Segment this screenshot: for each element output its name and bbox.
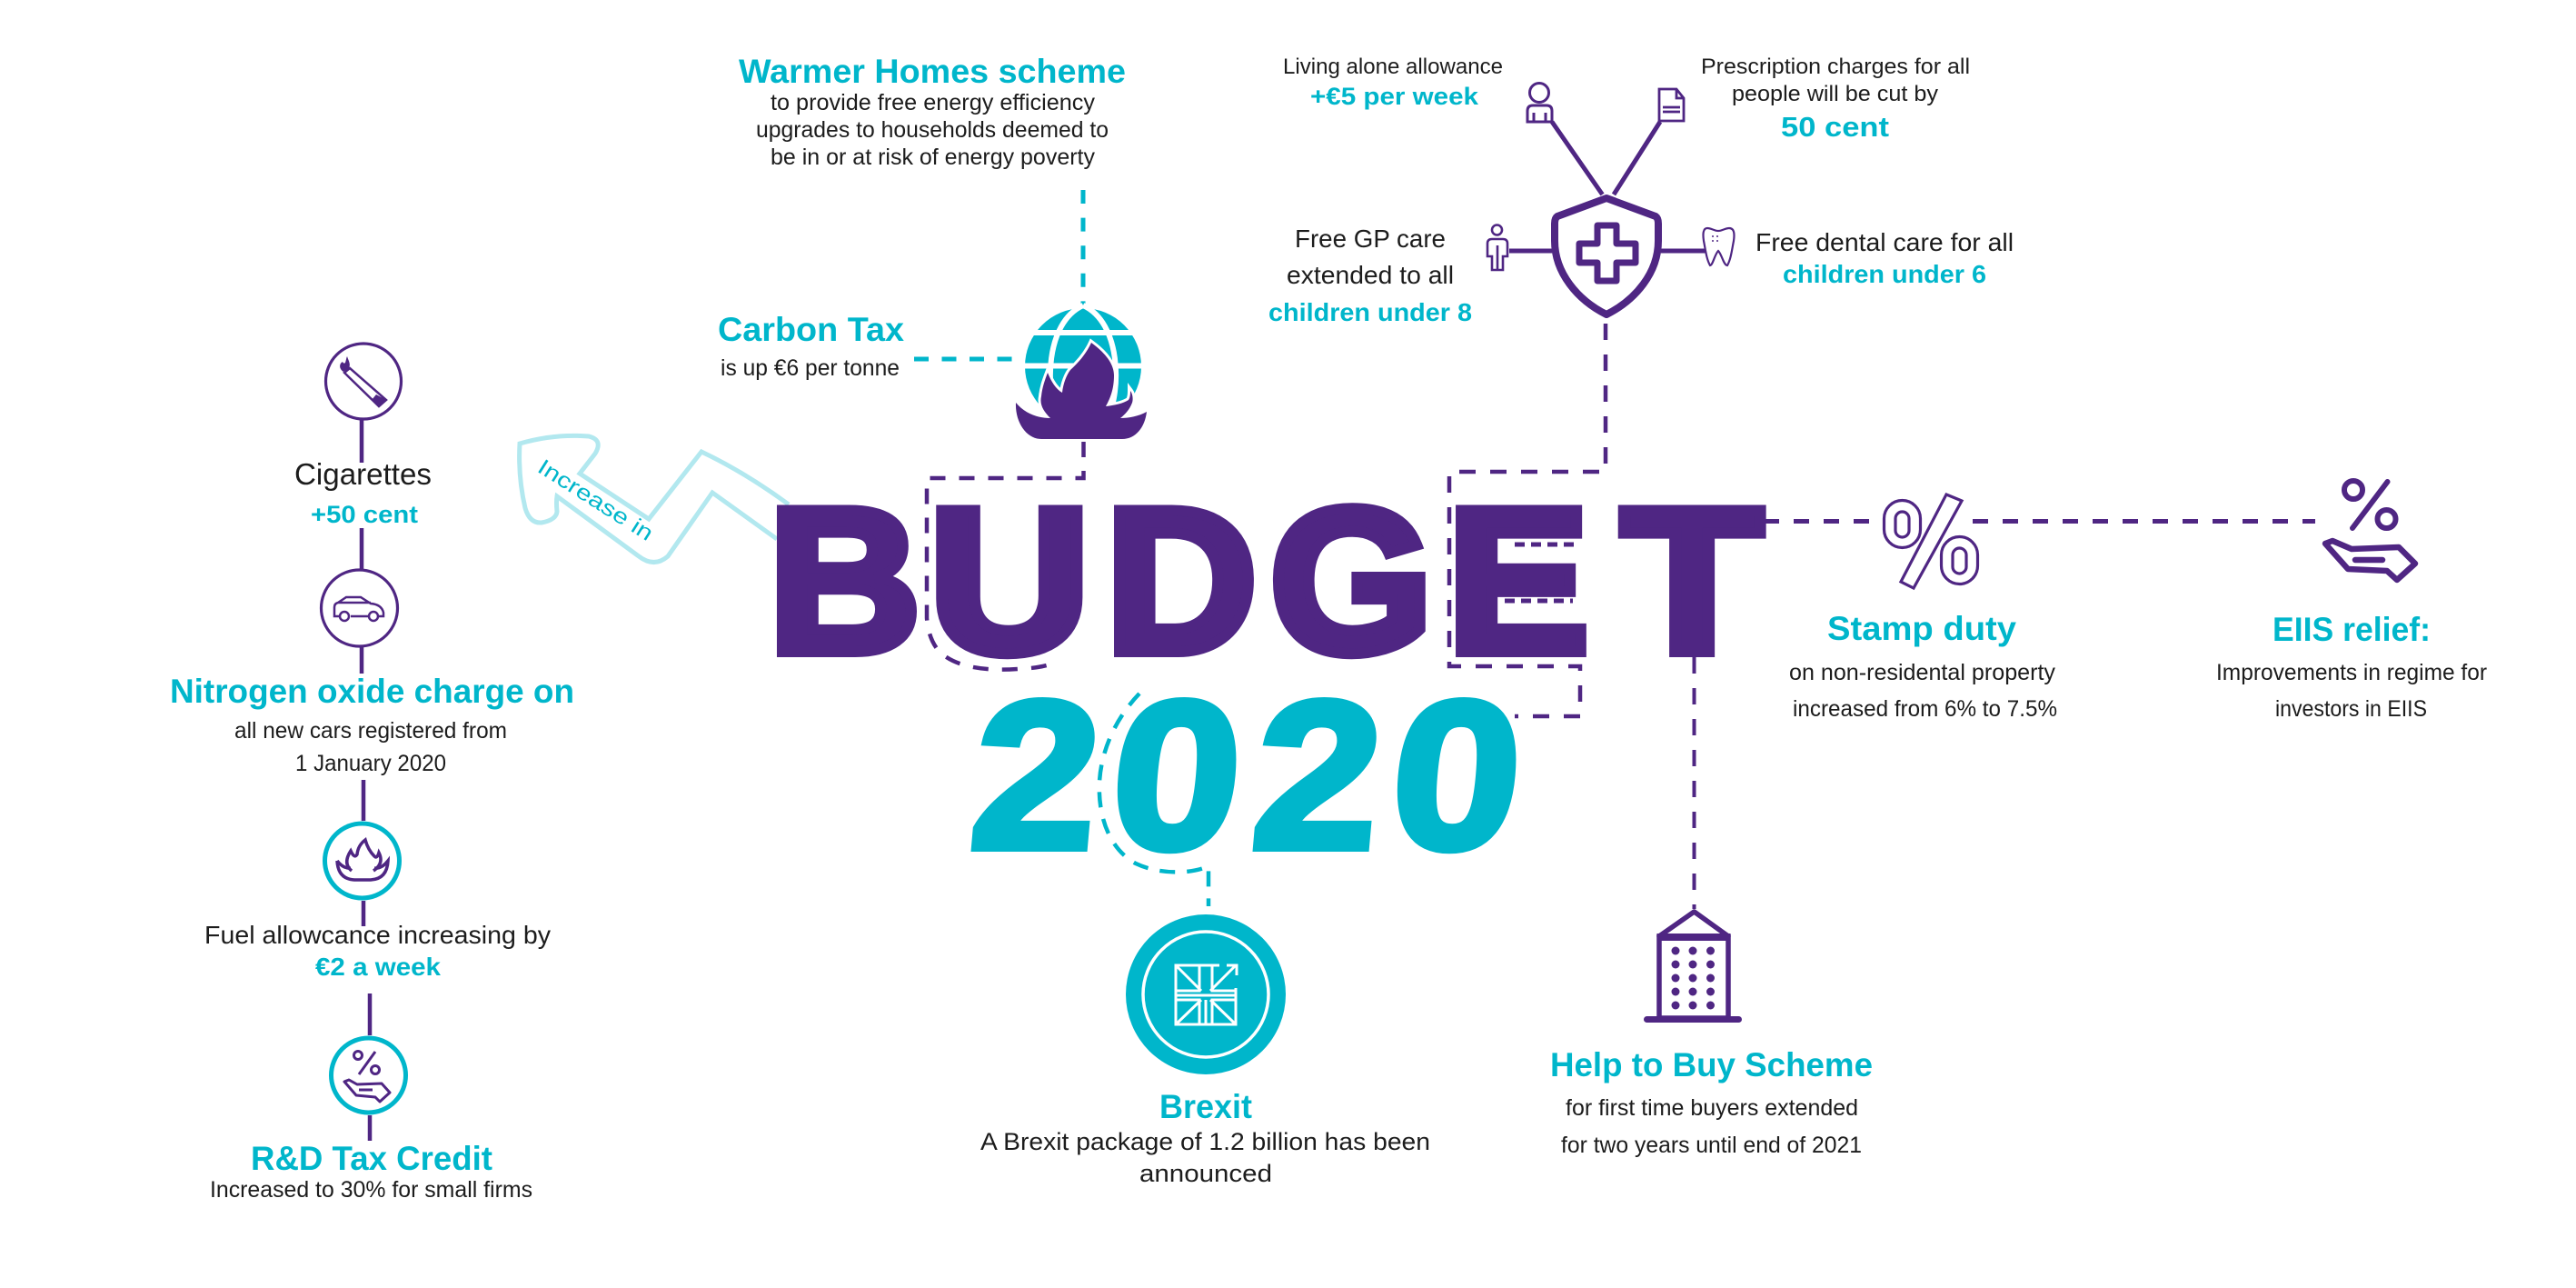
title: 2020: 0 bbox=[1103, 657, 1251, 894]
panel: cigarettes bbox=[294, 344, 432, 570]
value: €2 a week bbox=[315, 953, 441, 981]
icon: child bbox=[1487, 225, 1507, 270]
text: upgrades to households deemed to bbox=[756, 117, 1109, 143]
connector: dashed purple line from shield around E to 2020 bbox=[1449, 324, 1606, 716]
icon: burning globe bbox=[1016, 305, 1149, 439]
connector: dashed line from T to stamp duty bbox=[1764, 519, 1869, 524]
heading: EIIS relief: bbox=[2273, 611, 2431, 648]
text: announced bbox=[1139, 1160, 1272, 1187]
connector line bbox=[360, 528, 363, 570]
text: all new cars registered from bbox=[234, 718, 507, 744]
icon: percent hand bbox=[331, 1038, 405, 1113]
title: BUDGET: B bbox=[769, 466, 920, 695]
icon: percent hand bbox=[2325, 481, 2415, 580]
icon: tower building bbox=[1644, 912, 1742, 1023]
title: BUDGET: U bbox=[929, 466, 1090, 696]
connector line bbox=[360, 420, 363, 463]
title: 2020: 0 bbox=[1383, 657, 1531, 894]
text: increased from 6% to 7.5% bbox=[1793, 696, 2057, 722]
arrow label: Increase in bbox=[533, 454, 658, 546]
icon: document bbox=[1659, 89, 1684, 121]
connector line bbox=[368, 1115, 372, 1141]
label: Cigarettes bbox=[294, 457, 432, 491]
icon: shield bbox=[1509, 122, 1706, 315]
title: BUDGET: G bbox=[1270, 466, 1433, 696]
panel: R&D tax credit bbox=[210, 1038, 532, 1203]
heading: Warmer Homes scheme bbox=[739, 53, 1126, 90]
connector: dashed line from T to building bbox=[1692, 657, 1696, 909]
panel: nitrogen oxide charge bbox=[170, 570, 574, 821]
connector: dashes inside E bbox=[1505, 544, 1580, 601]
connector line bbox=[360, 647, 363, 674]
title: BUDGET: T bbox=[1622, 465, 1763, 695]
value: +€5 per week bbox=[1310, 83, 1479, 110]
text: on non-residental property bbox=[1789, 660, 2055, 685]
title: BUDGET: D bbox=[1106, 466, 1258, 695]
icon: union flag badge bbox=[1126, 914, 1286, 1074]
connector line bbox=[362, 901, 365, 926]
connector line bbox=[368, 993, 372, 1035]
text: is up €6 per tonne bbox=[721, 355, 900, 381]
panel: stamp duty bbox=[1789, 494, 2057, 722]
panel: carbon tax bbox=[718, 305, 1149, 439]
title: BUDGET: E bbox=[1447, 466, 1589, 695]
heading: Brexit bbox=[1159, 1088, 1252, 1125]
text: free GP care: Free GP care bbox=[1295, 225, 1446, 253]
text: investors in EIIS bbox=[2275, 696, 2427, 722]
connector bbox=[1081, 190, 1085, 309]
text: prescription charges: Prescription charges for all bbox=[1701, 55, 1970, 79]
heading: Help to Buy Scheme bbox=[1550, 1046, 1873, 1083]
value: 50 cent bbox=[1781, 111, 1889, 143]
icon: tooth bbox=[1703, 228, 1734, 265]
text: to provide free energy efficiency bbox=[771, 90, 1096, 115]
text: be in or at risk of energy poverty bbox=[771, 145, 1095, 170]
value: children under 6 bbox=[1783, 260, 1986, 288]
icon: car bbox=[322, 570, 398, 646]
connector: dashed teal line around 0 to Brexit bbox=[1099, 694, 1208, 906]
connector line bbox=[362, 780, 365, 821]
text: people will be cut by bbox=[1732, 82, 1938, 106]
value: children under 8 bbox=[1268, 298, 1472, 326]
connector: dashed purple line from carbon icon around U bbox=[927, 442, 1083, 670]
text: living alone allowance: Living alone allowance bbox=[1283, 55, 1503, 79]
icon: flame bbox=[325, 824, 400, 898]
panel: warmer homes scheme bbox=[739, 53, 1126, 309]
label: Fuel allowcance increasing by bbox=[204, 921, 551, 949]
panel: brexit bbox=[980, 914, 1430, 1187]
icon: cigarette bbox=[325, 344, 402, 419]
text: Increased to 30% for small firms bbox=[210, 1177, 532, 1203]
heading: Stamp duty bbox=[1827, 610, 2016, 647]
icon: person bbox=[1527, 84, 1552, 122]
panel: fuel allowance bbox=[204, 824, 551, 1035]
panel: help to buy bbox=[1550, 912, 1873, 1158]
heading: R&D Tax Credit bbox=[251, 1140, 492, 1177]
title: BUDGET bbox=[769, 465, 1763, 696]
panel: health measures bbox=[1268, 55, 2014, 326]
text: extended to all bbox=[1287, 261, 1454, 289]
text: A Brexit package of 1.2 billion has been bbox=[980, 1128, 1430, 1155]
connector: dashed line from stamp duty to EIIS bbox=[1973, 519, 2315, 524]
panel: EIIS relief bbox=[2216, 481, 2487, 722]
value: +50 cent bbox=[311, 501, 418, 528]
title: 2020: 2 bbox=[1245, 658, 1391, 894]
text: 1 January 2020 bbox=[295, 751, 446, 776]
title: 2020 bbox=[963, 657, 1531, 894]
text: for two years until end of 2021 bbox=[1561, 1133, 1862, 1158]
text: Improvements in regime for bbox=[2216, 660, 2487, 685]
heading: Nitrogen oxide charge on bbox=[170, 673, 574, 710]
icon: percent outline bbox=[1885, 494, 1977, 588]
heading: Carbon Tax bbox=[718, 311, 904, 348]
title: 2020: 2 bbox=[963, 658, 1109, 894]
text: for first time buyers extended bbox=[1566, 1095, 1858, 1121]
text: free dental care: Free dental care for all bbox=[1755, 228, 2014, 256]
arrow: increase in bbox=[520, 435, 789, 562]
connector bbox=[914, 356, 1012, 362]
